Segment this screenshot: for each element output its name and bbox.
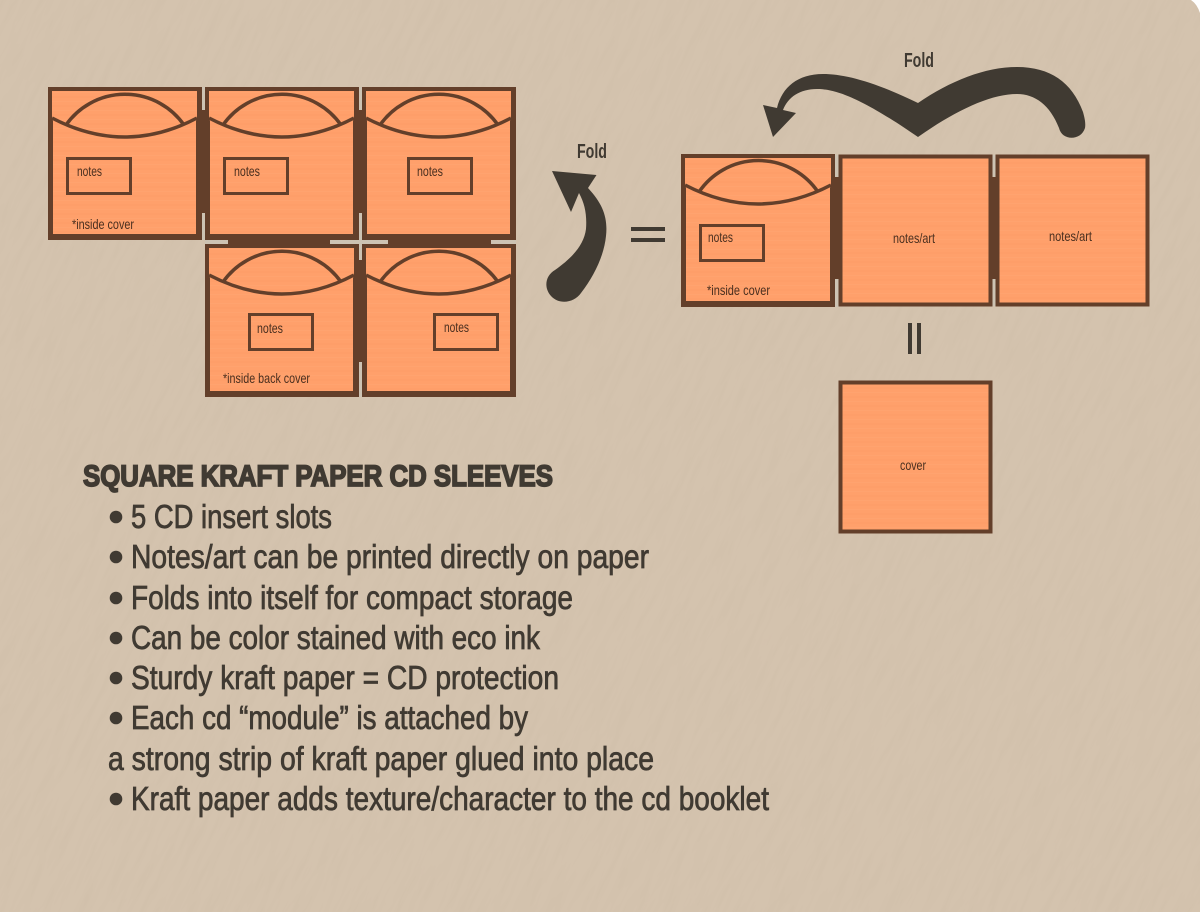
bullet: notes/art: Notes/art can be printed directly on paper bbox=[131, 538, 649, 575]
module 4: inside back cover bbox=[205, 244, 359, 397]
arrow: small fold arrow bbox=[546, 171, 606, 302]
equals sign bbox=[631, 227, 665, 242]
bullet: sturdy: Sturdy kraft paper = CD protection bbox=[131, 659, 559, 696]
bullet: 5 CD insert slots: 5 CD insert slots bbox=[131, 498, 332, 535]
module 5 bbox=[362, 244, 516, 397]
module 1: inside cover: notes bbox=[77, 163, 102, 179]
panel: folded sleeve bbox=[681, 154, 1148, 307]
label: fold (top): Fold bbox=[904, 50, 934, 72]
bullet: color stained: Can be color stained with eco ink bbox=[131, 619, 540, 656]
module 1: inside cover bbox=[48, 87, 202, 240]
label: fold (left): Fold bbox=[577, 141, 607, 163]
bullet: texture: Kraft paper adds texture/character to the cd booklet bbox=[131, 780, 769, 817]
connectors bbox=[831, 155, 1000, 307]
heading: SQUARE KRAFT PAPER CD SLEEVES bbox=[83, 460, 553, 493]
connectors between modules bbox=[196, 87, 516, 397]
module: inside cover: *inside cover bbox=[707, 282, 770, 298]
module 5: notes bbox=[444, 319, 469, 335]
text block: feature list bbox=[108, 498, 769, 817]
module: inside cover bbox=[681, 154, 835, 307]
bullet: module attachment: a strong strip of kraft paper glued into place bbox=[108, 740, 654, 777]
module: notes/art 1 bbox=[840, 156, 990, 304]
module: cover: cover bbox=[900, 457, 926, 473]
module: notes/art 2: notes/art bbox=[1049, 228, 1092, 244]
module 3 bbox=[362, 87, 516, 240]
module 1: inside cover: *inside cover bbox=[72, 216, 134, 232]
module 2 bbox=[205, 87, 359, 240]
module: cover bbox=[840, 382, 990, 532]
module 4: inside back cover: notes bbox=[257, 320, 283, 336]
bullet: module attachment: Each cd “module” is attached by bbox=[131, 699, 528, 736]
module 3: notes bbox=[417, 163, 443, 179]
module 2: notes bbox=[234, 163, 260, 179]
equals sign: vertical bbox=[908, 323, 921, 354]
module 4: inside back cover: *inside back cover bbox=[223, 370, 310, 386]
bullet: module attachment bbox=[108, 699, 654, 777]
panel: unfolded sleeve modules bbox=[48, 87, 516, 397]
arrow: large fold arrow bbox=[763, 67, 1085, 138]
module: inside cover: notes bbox=[708, 229, 733, 245]
module: notes/art 2 bbox=[998, 156, 1148, 304]
module: notes/art 1: notes/art bbox=[893, 230, 935, 246]
bullet: folds: Folds into itself for compact storage bbox=[131, 579, 573, 616]
